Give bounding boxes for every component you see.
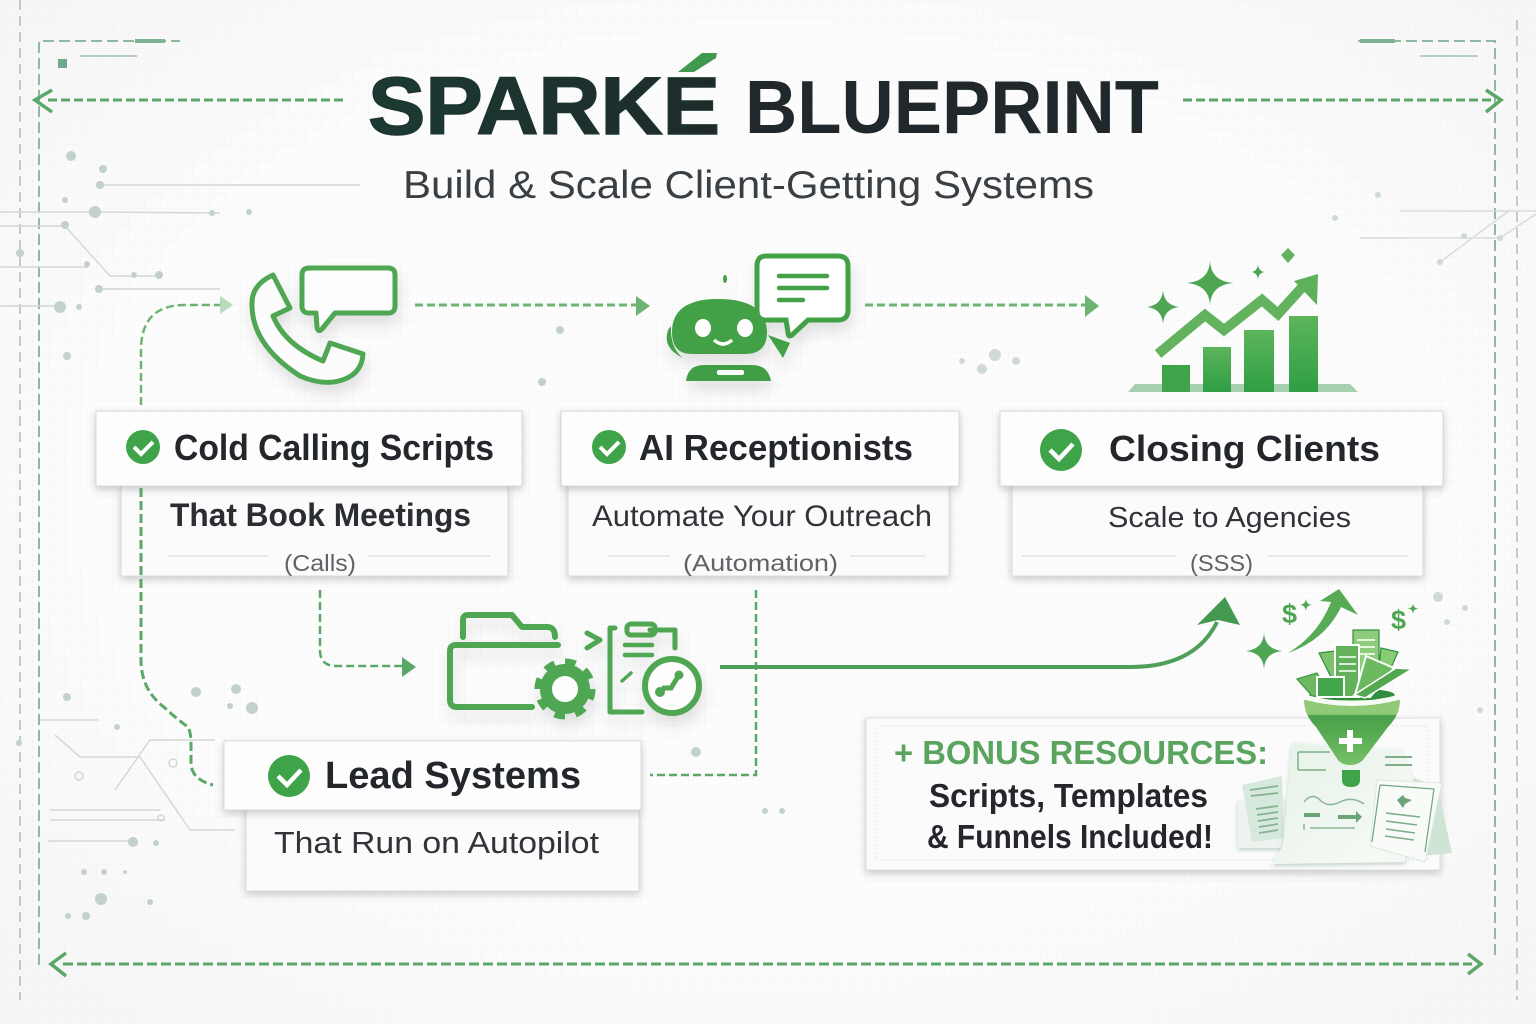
folder bbox=[463, 615, 555, 637]
arrow: calls to folder bbox=[320, 590, 416, 677]
card header bbox=[561, 411, 959, 486]
arrow: bottom bbox=[51, 953, 1481, 976]
arrow: loop into phone bbox=[141, 296, 233, 405]
chevron bbox=[587, 633, 600, 648]
chat bubble bbox=[757, 256, 848, 336]
icon: robot with chat bubble bbox=[667, 256, 848, 381]
card detail panel: (Automation) bbox=[683, 550, 838, 576]
icon: documents stack bbox=[1238, 743, 1452, 864]
dollar signs: $ bbox=[1282, 599, 1297, 629]
robot base bbox=[686, 365, 771, 381]
bonus text: Scripts, Templates bbox=[929, 777, 1208, 814]
card header bbox=[96, 411, 522, 486]
dollar signs bbox=[1282, 597, 1418, 635]
card: cold calling scripts bbox=[96, 411, 522, 576]
card header bbox=[1000, 411, 1443, 486]
bonus text bbox=[927, 777, 1213, 855]
card detail panel bbox=[568, 484, 949, 576]
arrow: solid growth arrow bbox=[720, 597, 1240, 667]
sparkles bbox=[1147, 261, 1264, 324]
card header bbox=[224, 741, 641, 810]
clock badge bbox=[645, 659, 699, 713]
title word: Blueprint: BLUEPRINT bbox=[745, 65, 1159, 149]
circuit decoration: right bbox=[959, 192, 1536, 713]
dollar signs: ✦ bbox=[1408, 602, 1418, 616]
title bbox=[368, 44, 1159, 152]
bonus text: & Funnels Included! bbox=[927, 818, 1213, 855]
gear bbox=[539, 663, 591, 715]
bonus heading: + BONUS RESOURCES: bbox=[894, 734, 1268, 771]
card detail panel bbox=[246, 808, 639, 891]
card detail panel: Scale to Agencies bbox=[1108, 502, 1351, 534]
icon: funnel with cash bbox=[1246, 589, 1418, 787]
card detail panel bbox=[1012, 484, 1423, 576]
card detail panel: That Book Meetings bbox=[170, 497, 471, 533]
card detail panel: (Calls) bbox=[284, 550, 356, 576]
card detail panel bbox=[121, 484, 508, 576]
card header: Closing Clients bbox=[1109, 428, 1380, 469]
title word: Sparké: SPARKÉ bbox=[368, 61, 720, 152]
arrow: phone to robot bbox=[415, 296, 650, 316]
arrow: robot to chart bbox=[865, 295, 1099, 317]
card: lead systems bbox=[224, 741, 641, 891]
icon: phone and speech bubble bbox=[252, 268, 395, 382]
arrow: top left bbox=[35, 90, 343, 112]
icon: growth bar chart bbox=[1128, 248, 1358, 392]
card detail panel: That Run on Autopilot bbox=[274, 825, 599, 860]
cash bills bbox=[1297, 630, 1412, 701]
money rising arrow bbox=[1288, 589, 1358, 653]
circuit decoration: left bbox=[0, 151, 785, 920]
card detail panel: (SSS) bbox=[1190, 550, 1253, 576]
card header: Cold Calling Scripts bbox=[174, 427, 494, 468]
dollar signs: $ bbox=[1391, 605, 1406, 635]
icon: folder, gear and clipboard bbox=[450, 615, 699, 715]
funnel body bbox=[1304, 700, 1400, 765]
card detail panel: Automate Your Outreach bbox=[592, 500, 932, 533]
card header: Lead Systems bbox=[325, 755, 581, 797]
arrow: automation to lead systems bbox=[650, 590, 756, 775]
panel: bonus resources bbox=[866, 718, 1440, 870]
arrow: loop down to lead systems bbox=[141, 488, 213, 785]
sparkle bbox=[1246, 633, 1282, 669]
card header: AI Receptionists bbox=[639, 427, 913, 468]
card: AI receptionists bbox=[561, 411, 959, 576]
clipboard bbox=[610, 628, 642, 712]
dollar signs: ✦ bbox=[1300, 597, 1312, 613]
subtitle: Build & Scale Client-Getting Systems bbox=[403, 164, 1094, 207]
arrow: top right bbox=[1183, 90, 1501, 112]
card: closing clients bbox=[1000, 411, 1443, 576]
robot head bbox=[672, 299, 767, 354]
